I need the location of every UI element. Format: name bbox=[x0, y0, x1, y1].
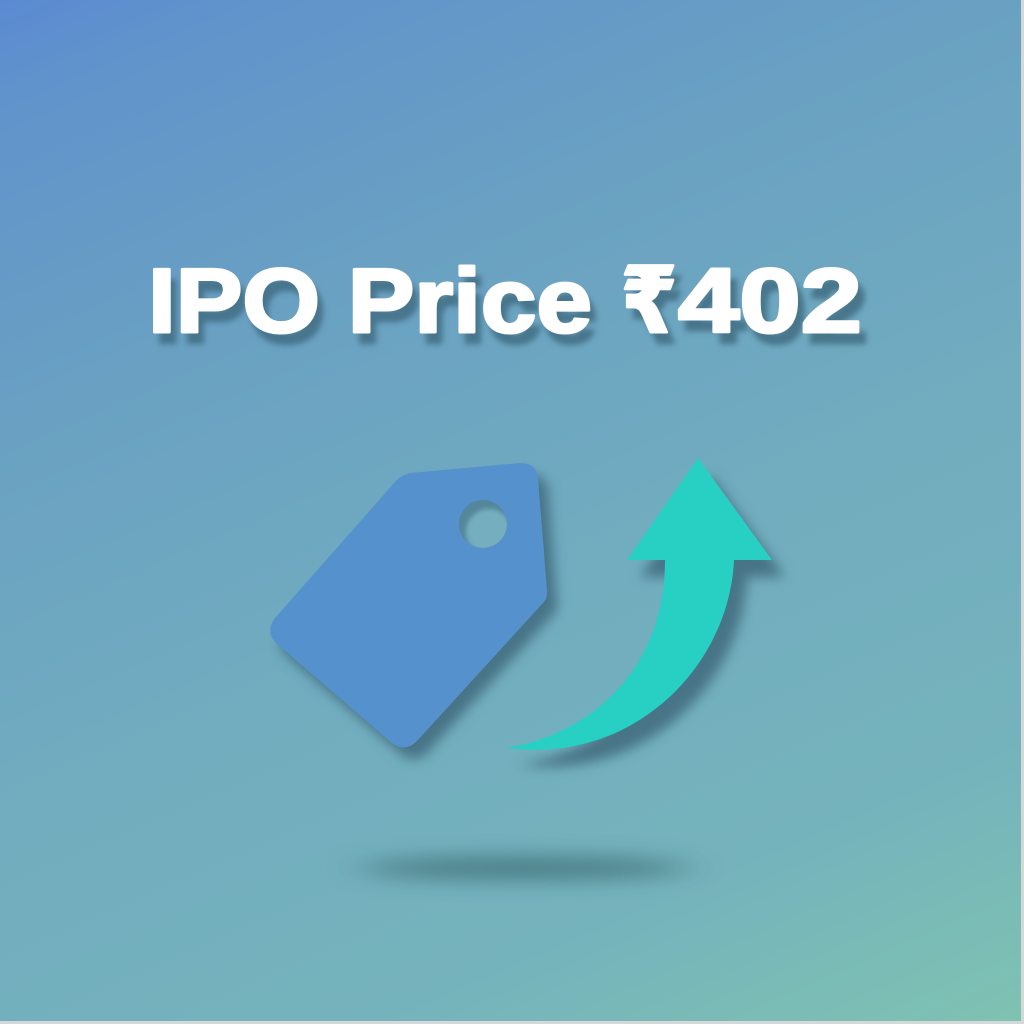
icon: upward curved arrow bbox=[505, 458, 785, 767]
title: IPO Price ₹402 bbox=[148, 251, 869, 363]
title: IPO Price ₹402: IPO Price bbox=[148, 251, 592, 352]
title: IPO Price ₹402: IPO Price bbox=[154, 262, 598, 363]
icon: price tag bbox=[270, 463, 557, 760]
title: IPO Price ₹402: 402 bbox=[685, 262, 869, 363]
title: IPO Price ₹402: ₹ bbox=[621, 251, 677, 352]
ground shadow bbox=[360, 856, 690, 880]
title: IPO Price ₹402: 402 bbox=[678, 251, 862, 352]
title: IPO Price ₹402: ₹ bbox=[628, 262, 684, 363]
